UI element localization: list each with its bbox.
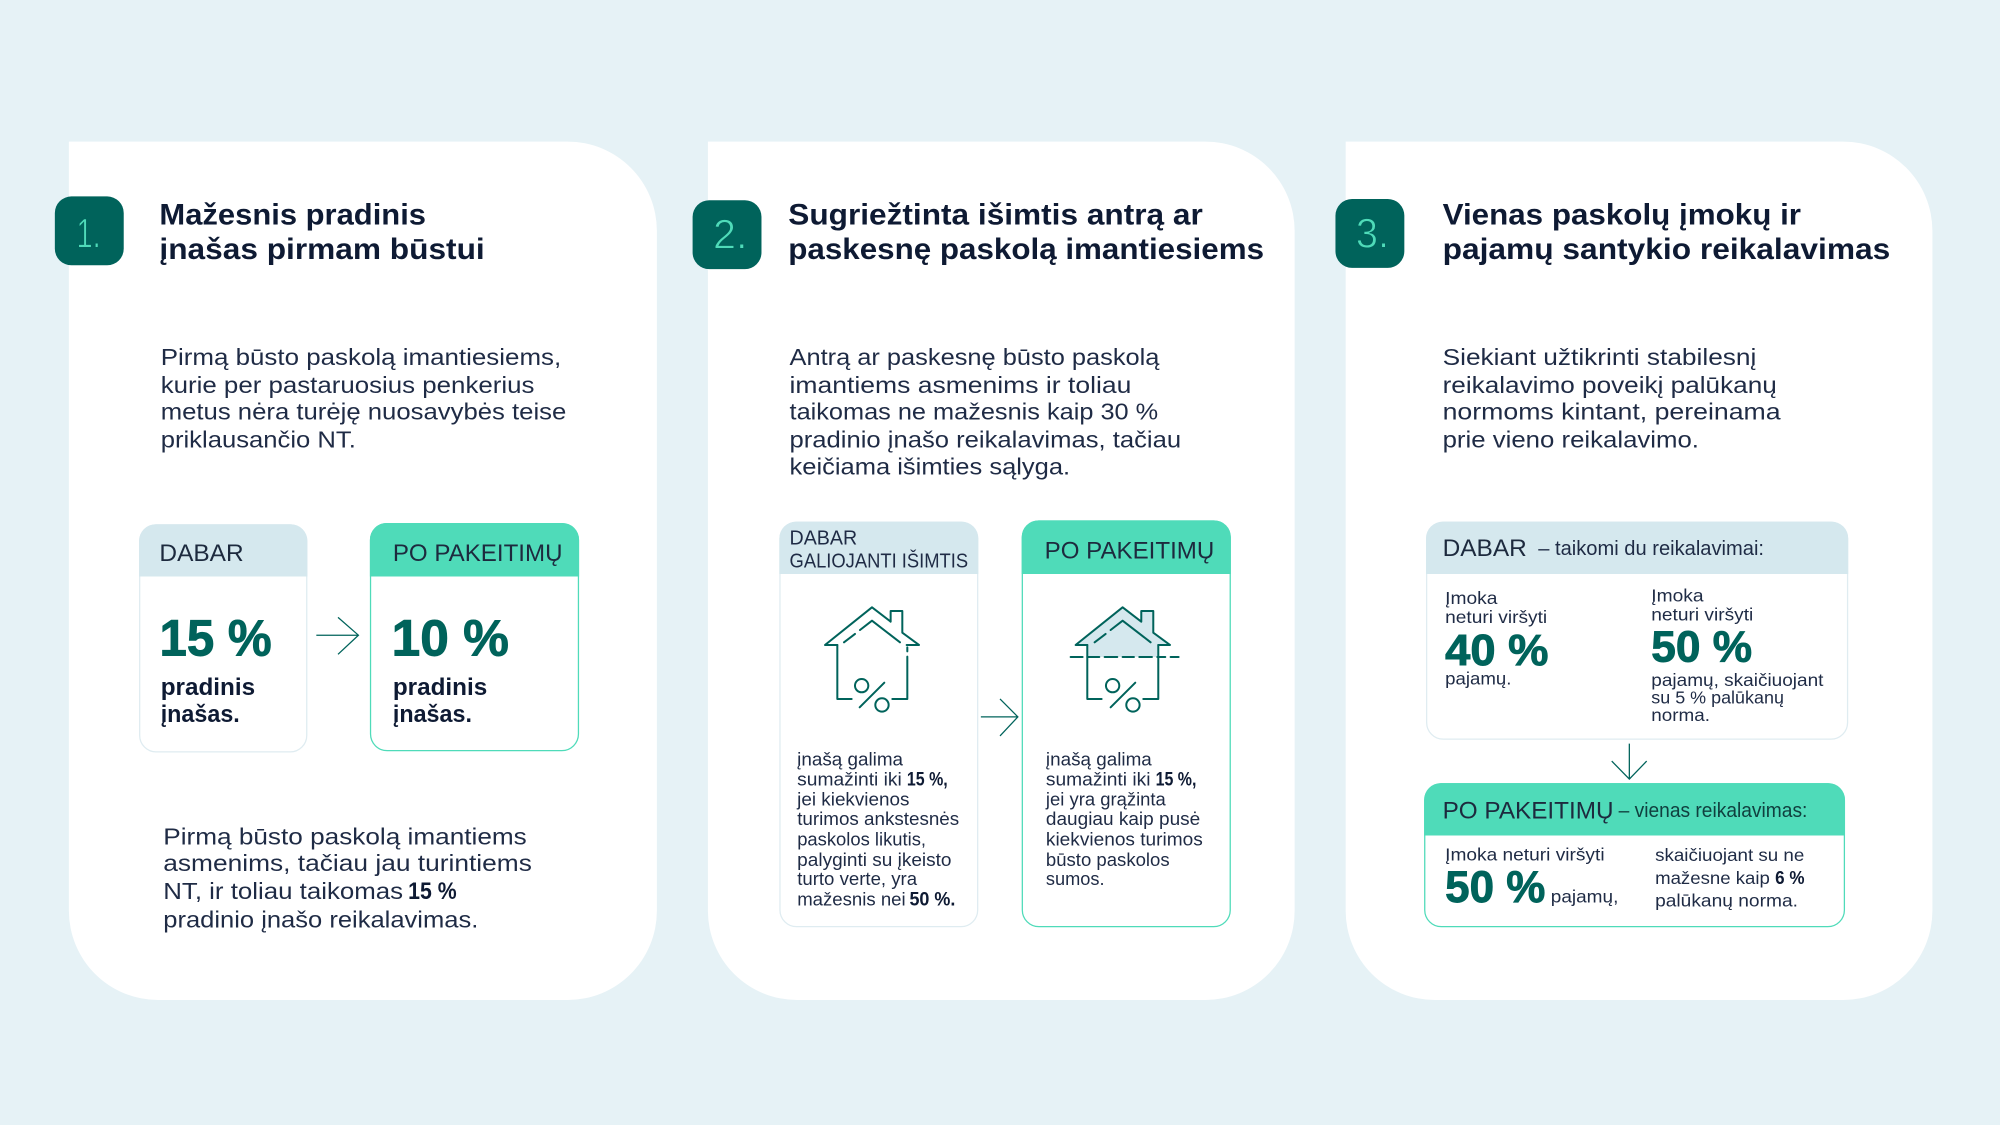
- badge: number 2: 2.: [713, 211, 747, 258]
- box: current exception: GALIOJANTI IŠIMTIS: [790, 550, 968, 573]
- box: current exception: 50 %.: [909, 890, 955, 911]
- box: now two requirements: Įmoka: [1651, 586, 1704, 606]
- arrow: down: [1612, 744, 1647, 779]
- box: now two requirements: neturi viršyti: [1445, 607, 1547, 627]
- box: after 10 %: PO PAKEITIMŲ: [393, 541, 562, 567]
- arrow: right: [981, 699, 1018, 736]
- badge: number 3: [1335, 199, 1404, 268]
- intro text: priklausančio NT.: [161, 427, 356, 453]
- box: now two requirements: pajamų, skaičiuojant: [1651, 670, 1824, 690]
- intro text: taikomas ne mažesnis kaip 30 %: [790, 399, 1158, 425]
- box: after change: būsto paskolos: [1046, 849, 1170, 870]
- closing text: 15 %: [408, 879, 457, 905]
- box: current exception: turto verte, yra: [797, 868, 918, 889]
- box: current exception: paskolos likutis,: [797, 829, 926, 850]
- box: now 15 %: pradinis: [161, 675, 255, 701]
- box: now 15 %: DABAR: [159, 541, 244, 567]
- heading: Sugriežtinta išimtis antrą ar: [788, 198, 1203, 231]
- box: after one requirement: pajamų,: [1551, 887, 1618, 907]
- intro text: normoms kintant, pereinama: [1443, 399, 1781, 425]
- box: now two requirements: 50 %: [1651, 623, 1752, 671]
- intro text: [1443, 344, 1781, 453]
- box: current exception: sumažinti iki: [797, 769, 902, 790]
- box: after 10 %: įnašas.: [393, 702, 472, 728]
- box: now two requirements: Įmoka: [1445, 588, 1498, 608]
- box: after one requirement: 50 %: [1445, 863, 1545, 912]
- box: after one requirement: PO PAKEITIMŲ: [1443, 798, 1614, 824]
- intro text: keičiama išimties sąlyga.: [790, 453, 1070, 479]
- intro text: pradinio įnašo reikalavimas, tačiau: [790, 427, 1181, 453]
- arrow: right: [316, 617, 358, 654]
- box: current exception: DABAR: [790, 528, 857, 550]
- intro text: Pirmą būsto paskolą imantiesiems,: [161, 344, 561, 370]
- box: current exception: 15 %,: [907, 770, 948, 791]
- heading: Mažesnis pradinis: [159, 198, 426, 231]
- box: after one requirement: Įmoka neturi viršyti: [1445, 845, 1605, 865]
- box: after change: jei yra grąžinta: [1045, 788, 1166, 809]
- box: now two requirements: 40 %: [1445, 627, 1548, 675]
- closing text: Pirmą būsto paskolą imantiems: [163, 823, 527, 849]
- badge: number 3: 3.: [1356, 209, 1389, 256]
- closing text: NT, ir toliau taikomas: [163, 878, 403, 904]
- box: after change: daugiau kaip pusė: [1046, 808, 1200, 829]
- box: after change: kiekvienos turimos: [1046, 829, 1203, 850]
- box: now two requirements: su 5 % palūkanų: [1651, 687, 1784, 707]
- box: current exception: įnašą galima: [797, 748, 904, 769]
- intro text: reikalavimo poveikį palūkanų: [1443, 372, 1777, 398]
- box: now two requirements: DABAR: [1443, 536, 1527, 562]
- intro text: metus nėra turėję nuosavybės teise: [161, 399, 566, 425]
- box: now two requirements: neturi viršyti: [1651, 605, 1753, 625]
- intro text: imantiems asmenims ir toliau: [790, 372, 1131, 398]
- box: now two requirements: norma.: [1651, 705, 1710, 725]
- box: after change: sumažinti iki: [1046, 769, 1151, 790]
- intro text: [790, 344, 1181, 479]
- heading: paskesnę paskolą imantiesiems: [788, 233, 1264, 266]
- box: now 15 %: [139, 524, 307, 752]
- box: now two requirements: pajamų.: [1445, 668, 1511, 688]
- box: after one requirement: – vienas reikalavimas:: [1619, 800, 1807, 822]
- icon: house with percent: [825, 607, 919, 712]
- box: after one requirement: 6 %: [1775, 867, 1804, 888]
- box: now two requirements: – taikomi du reikalavimai:: [1538, 538, 1764, 560]
- box: after one requirement: [1424, 783, 1845, 927]
- intro text: Siekiant užtikrinti stabilesnį: [1443, 344, 1756, 370]
- panel: 3 single income ratio: [1335, 142, 1932, 1000]
- box: after one requirement: skaičiuojant su ne: [1655, 845, 1804, 865]
- box: after 10 %: pradinis: [393, 675, 487, 701]
- box: after change: PO PAKEITIMŲ: [1045, 539, 1214, 565]
- closing text: [163, 823, 532, 932]
- closing text: pradinio įnašo reikalavimas.: [163, 906, 478, 932]
- heading: įnašas pirmam būstui: [159, 233, 485, 266]
- box: current exception: jei kiekvienos: [796, 788, 909, 809]
- heading: Vienas paskolų įmokų ir: [1443, 198, 1801, 231]
- box: after one requirement: palūkanų norma.: [1655, 891, 1798, 911]
- box: after change: sumos.: [1046, 868, 1105, 889]
- box: now 15 %: įnašas.: [161, 702, 240, 728]
- badge: number 2: [693, 200, 761, 269]
- box: after change: 15 %,: [1156, 770, 1196, 791]
- box: current exception: turimos ankstesnės: [797, 808, 959, 829]
- intro text: kurie per pastaruosius penkerius: [161, 372, 534, 398]
- intro text: Antrą ar paskesnę būsto paskolą: [790, 344, 1160, 370]
- box: after 10 %: 10 %: [392, 610, 509, 667]
- closing text: asmenims, tačiau jau turintiems: [163, 850, 532, 876]
- heading: pajamų santykio reikalavimas: [1443, 233, 1890, 266]
- badge: number 1: [55, 196, 124, 265]
- panel: 1 lower down payment: [55, 142, 657, 1000]
- heading: [788, 198, 1264, 266]
- box: after change: įnašą galima: [1046, 748, 1152, 769]
- box: after 10 %: [370, 523, 579, 751]
- box: after one requirement: mažesne kaip: [1655, 868, 1770, 888]
- intro text: [161, 344, 566, 453]
- heading: [159, 198, 485, 266]
- box: current exception: [779, 522, 978, 927]
- box: now 15 %: 15 %: [159, 610, 272, 667]
- box: now two requirements: [1426, 522, 1848, 739]
- box: after change: [1022, 520, 1231, 927]
- badge: number 1: 1.: [77, 209, 101, 256]
- icon: house with shaded roof and percent: [1071, 607, 1179, 712]
- intro text: prie vieno reikalavimo.: [1443, 427, 1699, 453]
- box: current exception: palyginti su įkeisto: [797, 849, 952, 870]
- box: current exception: mažesnis nei: [797, 889, 906, 910]
- panel: 2 tightened exception: [693, 142, 1295, 1000]
- heading: [1443, 198, 1890, 266]
